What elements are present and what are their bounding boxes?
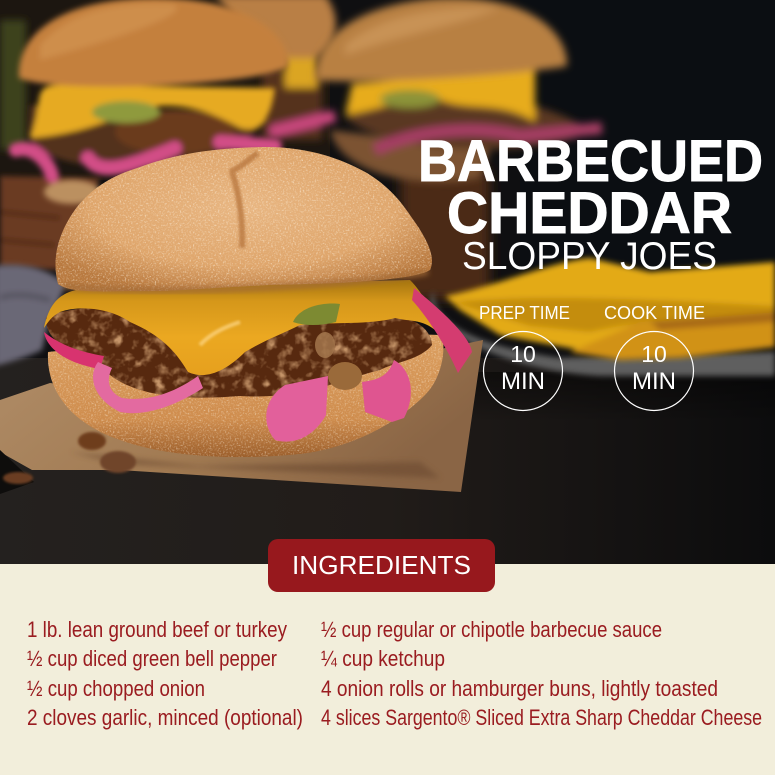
melted cheddar <box>44 280 440 375</box>
parchment paper <box>0 340 483 492</box>
ingredient list: right column: ¼ cup ketchup <box>321 646 445 671</box>
pickled onions <box>44 288 472 442</box>
ingredient list: right column: ½ cup regular or chipotle barbecue sauce <box>321 617 662 642</box>
cook time <box>604 302 705 410</box>
prep time circle <box>484 332 562 410</box>
bottom bun <box>48 330 443 457</box>
ingredients badge <box>268 539 495 592</box>
prep time unit: MIN <box>501 368 545 395</box>
ground meat <box>46 305 432 398</box>
background burger left <box>16 0 288 204</box>
top bun <box>55 147 432 291</box>
table surface <box>0 358 775 565</box>
prep time <box>479 302 570 410</box>
blurred backdrop <box>0 0 775 300</box>
subtitle: Sloppy Joes: SLOPPY JOES <box>462 235 717 278</box>
cheese slices <box>445 258 775 360</box>
cook time circle <box>614 332 694 410</box>
title <box>418 129 763 278</box>
ingredient list: left column <box>27 617 303 730</box>
ingredients heading: INGREDIENTS <box>292 550 471 580</box>
ingredient list: right column: 4 onion rolls or hamburger buns, lightly toasted <box>321 676 718 701</box>
cook time unit: MIN <box>632 368 676 395</box>
cook time value: 10 <box>641 341 667 367</box>
wooden board <box>0 176 100 270</box>
food photograph <box>0 0 775 565</box>
background burger right <box>316 0 602 182</box>
table crumbs and shadow <box>0 432 136 494</box>
plate <box>430 290 775 376</box>
title line: Cheddar: CHEDDAR <box>447 181 732 246</box>
ingredient list: left column: ½ cup diced green bell pepper <box>27 646 277 671</box>
cook time label: COOK TIME <box>604 302 705 323</box>
ingredient list: right column <box>321 617 762 730</box>
background burger middle <box>215 0 336 140</box>
grey napkin <box>0 265 66 366</box>
ingredient list: left column: 1 lb. lean ground beef or turkey <box>27 617 287 642</box>
cream ingredients panel <box>0 564 775 775</box>
prep time label: PREP TIME <box>479 302 570 323</box>
cheese plate <box>430 258 775 376</box>
main sloppy joe <box>44 147 472 457</box>
ingredient list: left column: ½ cup chopped onion <box>27 676 205 701</box>
prep time value: 10 <box>510 341 536 367</box>
ingredient list: left column: 2 cloves garlic, minced (optional) <box>27 705 303 730</box>
